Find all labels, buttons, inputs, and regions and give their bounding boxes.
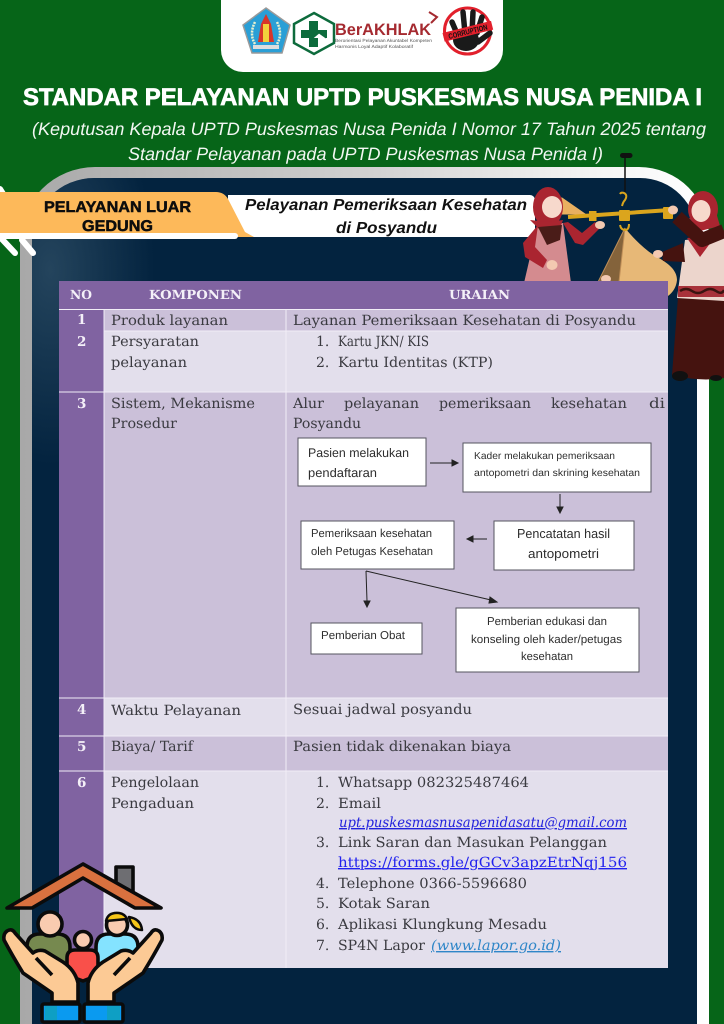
row 6: Link Saran dan Masukan Pelanggan [338,835,607,851]
row 2: 1. [316,334,329,350]
arrow [557,494,563,513]
step: edukasi: konseling oleh kader/petugas [471,634,622,646]
row 6: upt.puskesmasnusapenidasatu@gmail.com [339,815,627,831]
step: kader: antopometri dan skrining kesehatan [474,468,640,479]
header logo tab [221,0,503,72]
service title banner: di Posyandu [336,220,437,237]
number column [59,309,104,968]
roof [7,864,161,908]
decorative strokes [0,189,33,253]
service title banner [228,195,535,237]
row 3: di [649,396,666,412]
arrow [430,460,458,466]
row 3: Posyandu [293,416,361,432]
content frame [20,167,709,1024]
table header [59,281,668,309]
row 2 [77,334,493,371]
step: edukasi [456,608,639,672]
flowchart [298,438,651,672]
row 6: 2. [316,796,329,812]
step: kader [463,443,651,492]
row 4: Sesuai jadwal posyandu [293,702,472,718]
row 6: (www.lapor.go.id) [431,938,561,954]
cuffs [42,1004,123,1022]
logo: BerAKHLAK [335,12,437,49]
row 6: Pengelolaan [111,775,199,791]
row 1 [77,309,668,331]
row 6: Aplikasi Klungkung Mesadu [337,917,547,933]
service title banner: Pelayanan Pemeriksaan Kesehatan [245,197,527,214]
step: kader: Kader melakukan pemeriksaan [474,451,615,462]
logo: BerAKHLAK: BerAKHLAK [335,21,431,39]
arrows: branch [364,571,497,607]
row 2: Persyaratan [111,334,199,350]
step: pendaftaran [298,438,426,486]
step: obat: Pemberian Obat [321,630,406,642]
subtitle: Standar Pelayanan pada UPTD Puskesmas Nusa Penida I) [128,144,603,164]
illustration: weighing scale and bag [562,153,677,296]
row 3 [77,392,668,698]
arrow [467,536,487,542]
row 2: 2. [316,355,329,371]
row 3: pemeriksaan [439,396,531,412]
row 4: 4 [77,702,86,718]
row 6: 7. [316,938,329,954]
row 6: 3. [316,835,329,851]
row 5: 5 [77,739,86,755]
illustration: left woman [523,187,605,283]
row 4 [77,702,472,719]
icon: regional crest [243,8,290,53]
title: STANDAR PELAYANAN UPTD PUSKESMAS NUSA PENIDA I [23,84,702,111]
illustration: right woman [653,191,724,381]
row 1: Layanan Pemeriksaan Kesehatan di Posyandu [293,313,636,329]
table header: KOMPONEN [149,287,242,302]
category label [0,192,254,239]
step: edukasi: Pemberian edukasi dan [487,616,607,628]
step: pendaftaran: pendaftaran [308,466,377,480]
row 6: Kotak Saran [338,896,430,912]
icon: anti corruption stamp: CORRUPTION [447,23,488,41]
step: pencatatan [494,521,634,570]
row 3: Prosedur [111,416,177,432]
logo: BerAKHLAK: Harmonis Loyal Adaptif Kolaboratif [335,44,414,49]
row 6: 6. [316,917,329,933]
row 6: SP4N Lapor [338,938,425,954]
row 4: Waktu Pelayanan [111,703,241,719]
subtitle: (Keputusan Kepala UPTD Puskesmas Nusa Penida I Nomor 17 Tahun 2025 tentang [32,119,706,139]
row 1: 1 [77,312,86,328]
left hand [4,930,78,1002]
row 3: kesehatan [551,396,627,412]
row 2: 2 [77,334,86,350]
table header: URAIAN [449,287,510,302]
icon: anti corruption stamp [443,8,493,54]
row 3: Alur [292,396,324,412]
row 2: pelayanan [111,355,187,371]
step: obat [311,623,422,654]
row 6: Telephone 0366-5596680 [338,876,527,892]
chimney [116,867,133,895]
row 5: Biaya/ Tarif [111,739,195,755]
row 5 [77,736,668,771]
subtitle [32,119,706,164]
step: pencatatan: antopometri [528,546,599,561]
row 6: Whatsapp 082325487464 [338,775,529,791]
row 5: Pasien tidak dikenakan biaya [293,739,511,755]
icon: health ministry hexagon [294,13,334,54]
step: pemeriksaan [301,521,454,569]
step: pemeriksaan: oleh Petugas Kesehatan [311,546,433,558]
step: pencatatan: Pencatatan hasil [517,526,610,541]
row 3: Sistem, Mekanisme [111,396,255,412]
row 6: Pengaduan [111,796,194,812]
icon: family under a roof in caring hands [4,864,162,1022]
row 1: Produk layanan [111,313,228,329]
row 6: 4. [316,876,329,892]
row 2: Kartu JKN/ KIS [338,334,429,350]
row 6: https://forms.gle/gGCv3apzEtrNqj156 [338,855,627,871]
table [59,281,668,968]
family members [27,912,142,981]
step: pemeriksaan: Pemeriksaan kesehatan [311,528,432,540]
row 6: 6 [77,775,86,791]
category label: PELAYANAN LUAR [44,199,191,216]
step: edukasi: kesehatan [521,651,573,663]
row 6 [77,775,627,954]
row 3: pelayanan [344,396,419,412]
row 3: 3 [77,396,86,412]
step: pendaftaran: Pasien melakukan [308,446,409,460]
row 6: 1. [316,775,329,791]
category label: GEDUNG [82,218,153,235]
table header: NO [70,287,92,302]
row 6: Email [338,796,382,812]
logo: BerAKHLAK: Berorientasi Pelayanan Akuntabel Kompeten [335,38,433,43]
row 2: Kartu Identitas (KTP) [338,355,493,371]
row 6: 5. [316,896,329,912]
right hand [88,930,162,1002]
